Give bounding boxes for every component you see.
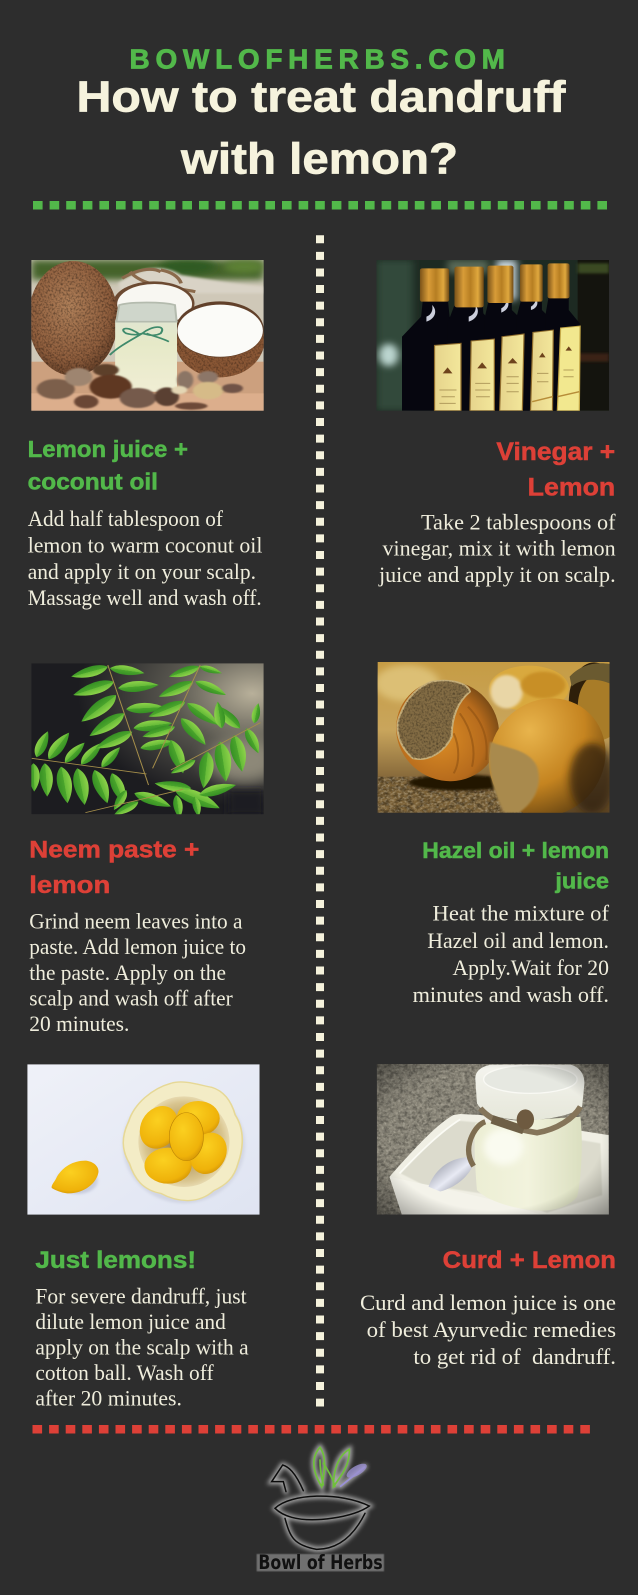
body text: Grind neem leaves into a <box>29 909 243 934</box>
panel: neem paste + lemon <box>28 662 281 1036</box>
body text: Heat the mixture of <box>432 901 610 926</box>
site name: BOWLOFHERBS.COM <box>130 43 505 74</box>
body text <box>28 506 262 610</box>
heading: juice <box>554 869 609 894</box>
body text: paste. Add lemon juice to <box>29 934 246 959</box>
heading: Lemon <box>528 474 615 502</box>
body text: the paste. Apply on the <box>29 960 226 985</box>
heading <box>29 836 199 899</box>
body text: juice and apply it on scalp. <box>378 562 616 587</box>
body text: lemon to warm coconut oil <box>28 533 262 558</box>
heading: Lemon juice + <box>28 436 188 462</box>
photo: hazelnuts <box>378 662 610 813</box>
panel: vinegar + lemon <box>376 260 616 587</box>
body text: apply on the scalp with a <box>35 1335 249 1360</box>
body text: of best Ayurvedic remedies <box>367 1317 616 1342</box>
panel: just lemons <box>27 1064 260 1411</box>
body text: For severe dandruff, just <box>35 1283 247 1308</box>
body text: Curd and lemon juice is one <box>360 1290 616 1315</box>
heading: lemon <box>29 872 110 899</box>
body text: Apply.Wait for 20 <box>452 955 609 980</box>
title: How to treat dandruff <box>76 73 566 122</box>
panel: curd + lemon <box>360 1064 616 1369</box>
heading: Just lemons! <box>35 1247 196 1274</box>
body text <box>360 1290 616 1369</box>
title: with lemon? <box>180 134 458 183</box>
body text: Add half tablespoon of <box>28 506 224 531</box>
body text: Massage well and wash off. <box>28 585 262 610</box>
heading: coconut oil <box>28 468 158 494</box>
body text: cotton ball. Wash off <box>35 1360 214 1385</box>
title <box>76 73 566 183</box>
body text: after 20 minutes. <box>35 1386 182 1411</box>
photo: curd jar in white dish <box>376 1064 609 1214</box>
heading: Neem paste + <box>29 836 199 864</box>
body text: minutes and wash off. <box>413 982 609 1007</box>
heading <box>496 438 615 502</box>
photo: lemons in a bowl <box>27 1064 260 1215</box>
body text: to get rid of dandruff. <box>413 1344 616 1369</box>
panel: lemon juice + coconut oil <box>28 259 265 610</box>
body text <box>378 509 616 587</box>
photo: vinegar bottles <box>376 260 609 411</box>
body text: and apply it on your scalp. <box>28 559 256 584</box>
body text: vinegar, mix it with lemon <box>382 536 616 561</box>
heading: Hazel oil + lemon <box>422 838 609 863</box>
heading <box>422 838 609 894</box>
photo: neem leaves <box>31 663 264 814</box>
body text: Hazel oil and lemon. <box>427 928 609 953</box>
body text: 20 minutes. <box>29 1011 129 1036</box>
heading: Curd + Lemon <box>443 1247 616 1274</box>
photo: coconuts and coconut oil jar <box>31 260 264 411</box>
body text <box>35 1283 249 1411</box>
body text <box>29 909 246 1036</box>
body text: dilute lemon juice and <box>35 1309 226 1334</box>
body text: Take 2 tablespoons of <box>421 509 616 534</box>
body text <box>413 901 610 1007</box>
logo: Bowl of Herbs <box>256 1442 384 1574</box>
heading <box>28 436 188 494</box>
body text: scalp and wash off after <box>29 985 233 1010</box>
heading: Vinegar + <box>496 438 615 466</box>
panel: hazel oil + lemon juice <box>374 662 623 1007</box>
